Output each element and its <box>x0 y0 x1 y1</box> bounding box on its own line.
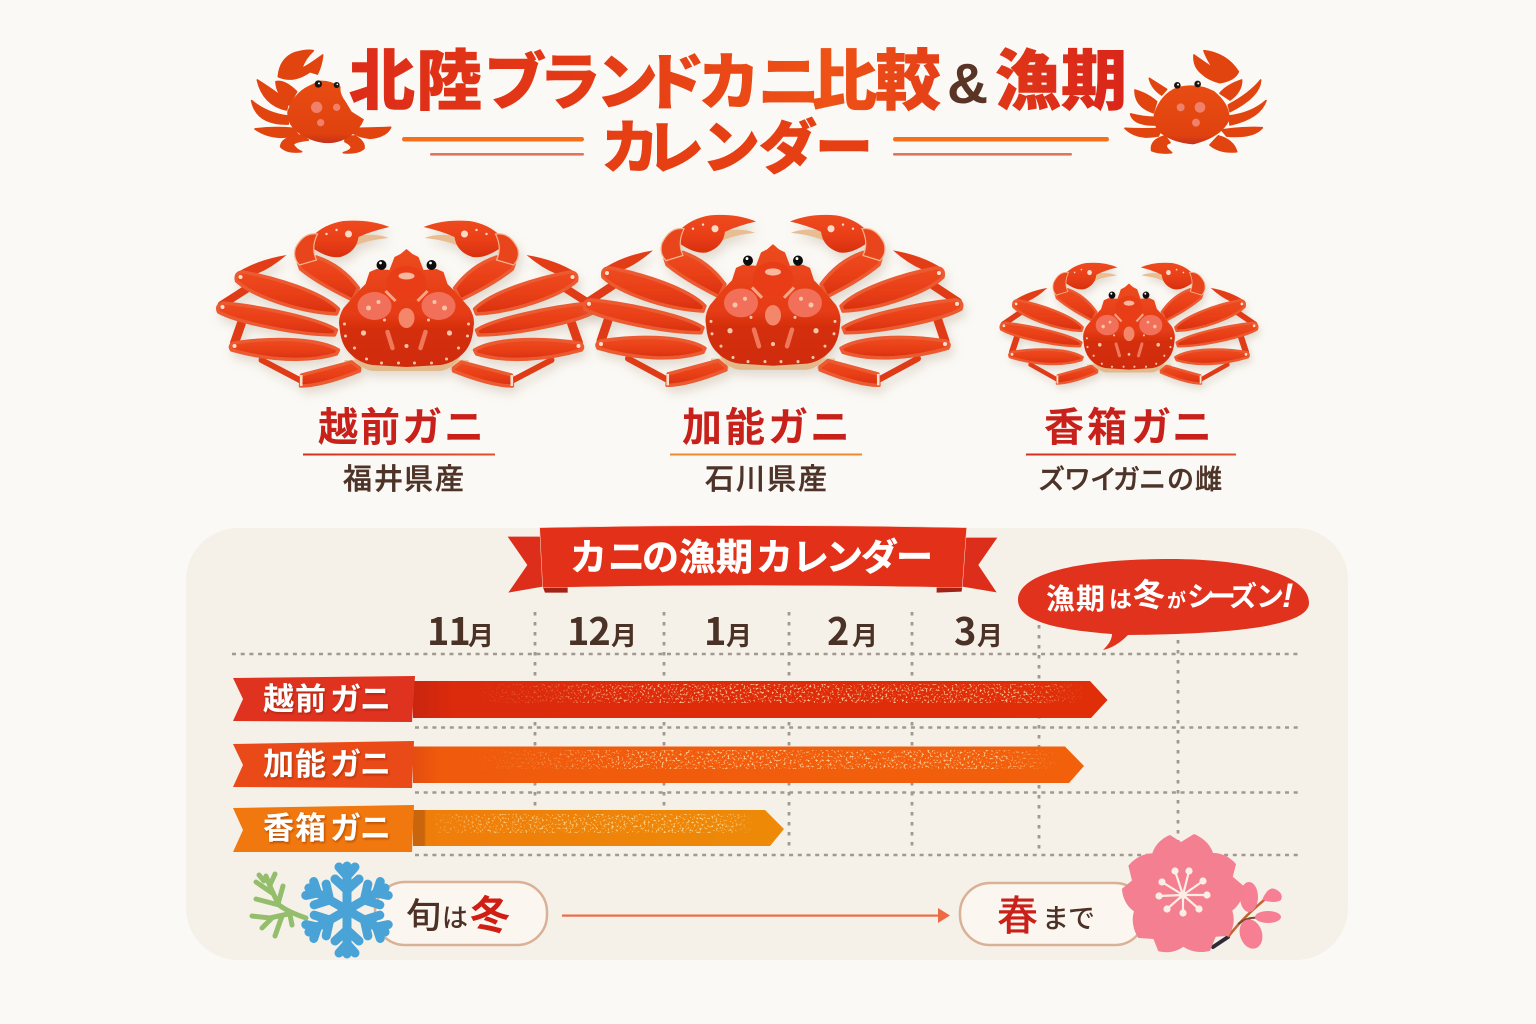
callout: season is winter: が <box>1167 589 1186 612</box>
season bar: Kano: 加能ガニ <box>263 747 391 782</box>
ribbon tails <box>508 537 543 593</box>
icon: right mini crab <box>1125 51 1266 153</box>
calendar heading text: カニの漁期カレンダー <box>570 537 933 578</box>
icon: left mini crab <box>252 50 391 153</box>
month: November: 月 <box>468 621 494 651</box>
month header row <box>427 601 1003 656</box>
arrow: winter to spring <box>562 908 950 923</box>
bar label <box>233 676 415 722</box>
month: March: 月 <box>977 621 1003 651</box>
panel: fishing calendar <box>186 528 1348 960</box>
title line 1: ブランドカニ <box>484 48 820 118</box>
speech bubble <box>1018 559 1309 650</box>
callout: season is winter: ! <box>1282 577 1293 615</box>
name: 香箱ガニ <box>1044 406 1212 450</box>
bar label <box>233 741 414 788</box>
season bar: Kano <box>233 741 1084 788</box>
icon: green sprig <box>252 874 306 936</box>
bubble text: 漁期 <box>1046 583 1105 616</box>
bar arrow <box>413 746 1084 783</box>
season bar: Echizen: 越前ガニ <box>263 682 391 717</box>
season bar: Echizen <box>233 676 1108 722</box>
icon: cherry blossom <box>1115 834 1251 963</box>
pill: in season in winter: 冬 <box>470 894 510 938</box>
ampersand: & <box>947 52 988 116</box>
title line 1: 比較 <box>811 44 941 118</box>
bar arrow <box>413 681 1108 718</box>
season bar: Kobako: 香箱ガニ <box>263 811 391 846</box>
callout: season is winter: シーズン <box>1187 580 1284 612</box>
month: December: 月 <box>611 621 637 651</box>
title line 1: 北陸 <box>349 44 482 118</box>
name: 加能ガニ <box>682 406 850 450</box>
title block <box>349 44 1127 181</box>
month: January: 月 <box>726 621 752 651</box>
pill text: 旬 <box>406 897 441 936</box>
crab label: Kano <box>670 406 862 496</box>
crab illustration: Kano <box>584 215 962 385</box>
month: December: 12 <box>567 601 610 656</box>
pill: until spring: まで <box>1042 904 1095 934</box>
pill: in season in winter <box>375 882 547 945</box>
left title decoration lines <box>402 137 584 156</box>
ribbon body <box>540 525 967 588</box>
icon: cherry branch <box>1213 882 1282 952</box>
crab illustration: Echizen <box>218 221 595 386</box>
callout: season is winter: 冬 <box>1133 577 1165 613</box>
ribbon banner: calendar heading <box>508 525 997 593</box>
title line 1 end: 漁期 <box>995 44 1127 118</box>
pill text: 春 <box>997 893 1038 939</box>
crab illustration: Kobako <box>1001 263 1257 383</box>
month: March: 3 <box>954 601 976 656</box>
pill: until spring <box>960 883 1145 945</box>
pill: in season in winter: は <box>442 903 468 933</box>
month: November: 11 <box>427 601 470 656</box>
month: January: 1 <box>704 601 726 656</box>
icon: snowflake <box>303 866 391 954</box>
crab label: Echizen <box>303 406 495 496</box>
season bar: Kobako <box>233 805 784 852</box>
origin: 福井県産 <box>343 463 464 496</box>
name: 越前ガニ <box>318 406 484 450</box>
origin: ズワイガニの雌 <box>1038 465 1222 495</box>
crab label: Kobako <box>1026 406 1236 495</box>
callout: season is winter <box>1018 559 1309 650</box>
callout: season is winter: は <box>1109 586 1132 612</box>
origin: 石川県産 <box>705 463 827 496</box>
bar label <box>233 805 414 852</box>
month: February: 月 <box>852 621 878 651</box>
title line 2: カレンダー <box>601 116 873 181</box>
month: February: 2 <box>827 601 849 656</box>
right title decoration lines <box>893 137 1109 156</box>
bar arrow <box>413 810 784 846</box>
calendar grid <box>232 612 1300 855</box>
